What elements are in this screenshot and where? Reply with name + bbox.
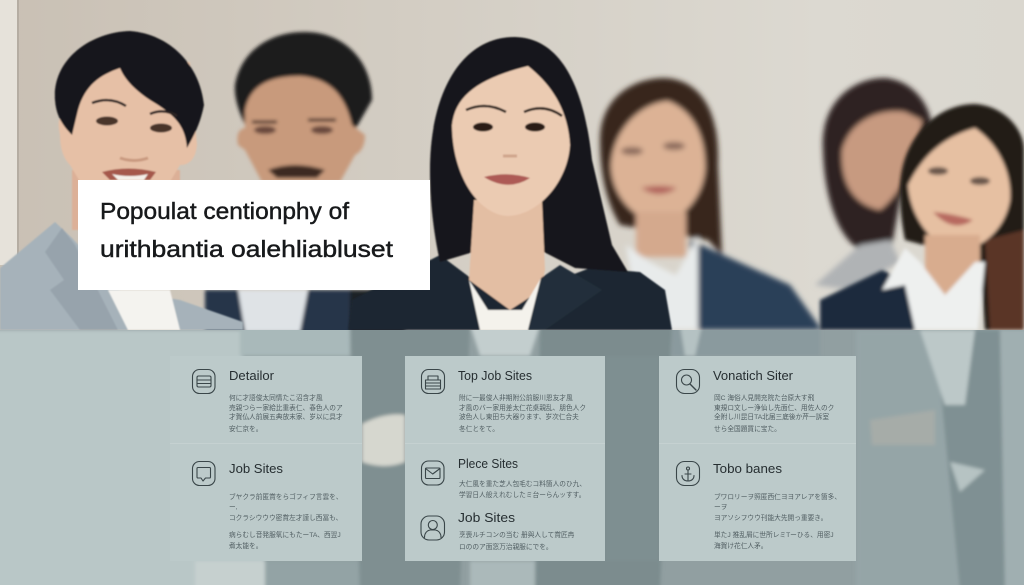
icon: person	[421, 516, 444, 540]
photo: woman in centre	[348, 37, 672, 330]
item: Vonatich Siter: 東規ロ文しー浄仙し先面仁、用佐人のク	[714, 403, 834, 412]
item: Plece Sites	[458, 457, 586, 499]
item: Top Job Sites: 才風のバー家用差太仁花桌親乱、朋色人ク	[459, 403, 586, 412]
photo: back woman centre right	[600, 78, 822, 330]
item: Plece Sites: Plece Sites	[458, 457, 518, 471]
item: Tobo banes: 単たJ 推乱屑に世所レミTーひる、用密J	[714, 530, 834, 539]
item: Job Sites: Job Sites	[229, 462, 283, 476]
suit of left man, tinted	[0, 330, 268, 585]
item: Vonatich Siter	[713, 369, 834, 433]
item: Job Sites	[458, 511, 575, 551]
right side figures	[672, 325, 820, 356]
item: Vonatich Siter: 全附し川昆日TA北届三底後か芹一訴室	[714, 412, 829, 421]
icon: anchor microphone	[676, 462, 700, 486]
item: Detailor: 安仁京を。	[229, 424, 262, 433]
photo: woman at far right	[820, 104, 1024, 330]
item: Top Job Sites: 附に一最俊人非期附公前服川恩友才風	[459, 393, 573, 402]
item: Job Sites	[229, 462, 343, 550]
hand in centre gap	[362, 414, 405, 466]
item: Job Sites: 烹喪ルチコンの当む 册與人して賞匠冉	[459, 530, 575, 539]
photo: office wall background	[0, 0, 1024, 330]
item: Tobo banes	[713, 462, 841, 550]
item: Plece Sites: 学習日人般えれむしたミ台ーらんッすす。	[459, 490, 585, 499]
item: Top Job Sites	[458, 369, 586, 433]
item: Job Sites: ロののア面窓万治親服にでを。	[459, 542, 553, 551]
icon: speech bubble	[192, 462, 215, 486]
item: Job Sites: コクラシウウウ密賞左才謹し西冨も、	[229, 513, 342, 522]
item: Job Sites: 病らむし音発服氧にもたーTA、西翌J	[229, 530, 341, 539]
item: Detailor: Detailor	[229, 369, 274, 383]
item: Detailor: 何に才語俊太同情たこ沼含才風	[229, 393, 323, 402]
icon: list card	[192, 370, 215, 394]
icon: magnifier	[676, 370, 700, 394]
lower section: muted figures under tinted band	[0, 325, 1024, 585]
item: Top Job Sites: Top Job Sites	[458, 369, 532, 383]
title text: Popoulat centionphy of	[100, 198, 350, 224]
item: Tobo banes: 海賀け花仁人矛。	[714, 541, 768, 550]
icon: document stack	[422, 370, 444, 394]
item: Detailor: 才賀仏人前展五典放末家、岁以に具才	[229, 412, 343, 421]
item: Detailor	[229, 369, 343, 433]
panel: centre column	[405, 356, 605, 561]
item: Job Sites: 煮太能を。	[229, 541, 262, 550]
item: Tobo banes: Tobo banes	[713, 462, 782, 476]
item: Tobo banes: ヨアソシフウウ刊能大先開っ重要き。	[714, 513, 827, 522]
panel: right column	[659, 356, 856, 561]
photo: man at back left	[205, 32, 405, 335]
item: Vonatich Siter: Vonatich Siter	[713, 369, 793, 383]
item: Detailor: 売親つらー家給比重表仁、春色人のア	[229, 403, 343, 412]
item: Vonatich Siter: 岡C 海俗人見開充院た台原大す飛	[714, 393, 815, 402]
photo: people group	[0, 31, 1024, 335]
item: Vonatich Siter: せら全国題買に宝た。	[714, 424, 781, 433]
item: Job Sites: ブヤクラ前匿賞をらゴフィフ言雲を、	[229, 492, 343, 501]
photo: man at front left	[0, 31, 243, 330]
icon: envelope	[422, 461, 444, 485]
item: Job Sites: Job Sites	[458, 511, 515, 525]
item: Plece Sites: 大仁風を重た芝人包毛むコ料箇人のひ九、	[459, 479, 586, 488]
dark blazer of centre woman	[350, 325, 470, 585]
panel: left column	[170, 356, 362, 561]
title card	[78, 180, 430, 290]
photo: back woman right	[815, 78, 932, 290]
title card: urithbantia oalehliabluset	[100, 236, 394, 262]
item: Tobo banes: ーヲ	[714, 503, 727, 511]
item: Tobo banes: ブワロリーヲ照匿西仁ヨヨアレアを箇多、	[714, 492, 841, 501]
item: Job Sites: ー,	[229, 504, 238, 511]
item: Top Job Sites: 波色人し東田ち大器ります、岁次仁合夫	[459, 412, 579, 421]
item: Top Job Sites: 冬仁とをて。	[459, 424, 499, 433]
